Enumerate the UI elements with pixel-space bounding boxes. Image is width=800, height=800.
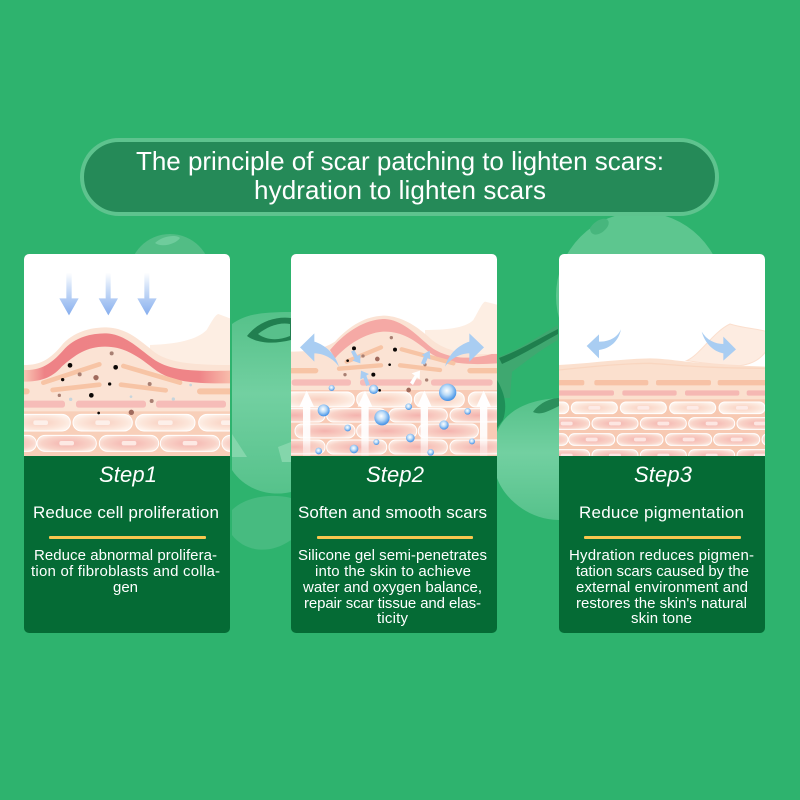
step description: water and oxygen balance, (302, 579, 482, 596)
step label: Step2 (366, 462, 424, 487)
icon: pressure arrows (59, 273, 157, 315)
step description: tation scars caused by the (576, 563, 749, 580)
panel: step 3 (559, 254, 765, 633)
pigment particles (343, 336, 428, 392)
step description: ticity (377, 610, 408, 627)
step label: Step1 (99, 462, 157, 487)
illustration: smoothed skin (559, 254, 765, 456)
panel: step 1 (24, 254, 230, 633)
illustration: hydration softening scar (291, 254, 497, 456)
title text: hydration to lighten scars (254, 175, 546, 205)
panel: step 2 (291, 254, 497, 633)
step label: Step3 (634, 462, 693, 487)
step description (31, 547, 220, 596)
skin cells (291, 392, 497, 454)
title banner (82, 140, 717, 214)
step description: into the skin to achieve (315, 563, 471, 580)
water bubbles (315, 384, 475, 456)
background water droplets (129, 212, 724, 550)
step description (569, 547, 754, 627)
step description (298, 547, 487, 627)
skin cells (559, 402, 765, 456)
step description: Silicone gel semi-penetrates (298, 547, 487, 564)
yellow divider (49, 536, 206, 539)
step heading: Soften and smooth scars (298, 503, 487, 522)
step description: skin tone (631, 610, 692, 627)
step description: tion of fibroblasts and colla- (31, 563, 220, 580)
icon: blue outward arrows (300, 333, 484, 386)
step description: gen (113, 579, 138, 596)
step heading: Reduce cell proliferation (33, 503, 219, 522)
step description: Reduce abnormal prolifera- (34, 547, 217, 564)
illustration: scar before treatment (24, 254, 230, 456)
step description: external environment and (576, 579, 748, 596)
step description: Hydration reduces pigmen- (569, 547, 754, 564)
yellow divider (317, 536, 473, 539)
icon: blue outward arrows (587, 329, 736, 361)
yellow divider (584, 536, 741, 539)
title text: The principle of scar patching to lighten scars: (136, 146, 664, 176)
step description: restores the skin's natural (576, 595, 747, 612)
icon: upward white arrows (299, 371, 491, 456)
skin cells (0, 414, 281, 451)
step description: repair scar tissue and elas- (304, 595, 481, 612)
pigment particles (58, 351, 192, 415)
step heading: Reduce pigmentation (579, 503, 744, 522)
title text (136, 146, 664, 205)
